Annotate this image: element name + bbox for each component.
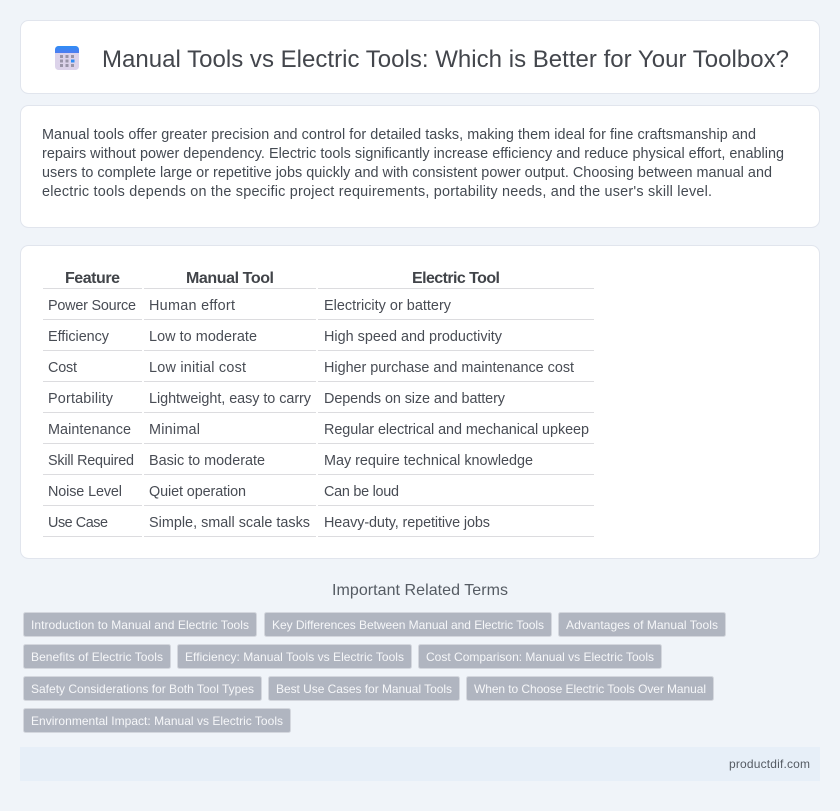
related term tags: Efficiency: Manual Tools vs Electric Tools — [185, 650, 404, 664]
table row: noise level — [48, 484, 399, 500]
related term tags: Cost Comparison: Manual vs Electric Tools — [426, 650, 654, 664]
footer — [20, 747, 820, 781]
related term tags: Key Differences Between Manual and Electric Tools — [272, 618, 544, 632]
table row: use case — [48, 515, 490, 531]
table header: Electric Tool — [412, 270, 500, 287]
related term tags: Safety Considerations for Both Tool Types — [31, 682, 254, 696]
table row: cost — [48, 360, 574, 376]
table header: Manual Tool — [186, 270, 274, 287]
title: Manual Tools vs Electric Tools: Which is Better for Your Toolbox? — [102, 46, 789, 73]
text block: introduction paragraph: users to complete large or repetitive jobs quickly and with consistent power output. Choosing between manual and — [42, 165, 772, 181]
related term tags: Benefits of Electric Tools — [31, 650, 163, 664]
table row: maintenance — [48, 422, 589, 438]
table row: cost: Higher purchase and maintenance cost — [324, 360, 574, 376]
table row: power source: Human effort — [149, 298, 235, 314]
table row: efficiency: High speed and productivity — [324, 329, 503, 345]
table row: power source: Power Source — [48, 298, 136, 314]
table row: noise level: Can be loud — [324, 484, 399, 500]
heading: important related terms: Important Related Terms — [332, 582, 508, 599]
table row: maintenance: Maintenance — [48, 422, 131, 438]
text block: introduction paragraph: electric tools depends on the specific project requirements, portability needs, and the user's skill level. — [42, 184, 712, 200]
related term tags: Introduction to Manual and Electric Tools — [31, 618, 249, 632]
table row: cost: Low initial cost — [149, 360, 246, 376]
icon: calendar — [55, 46, 79, 70]
related term tags: Advantages of Manual Tools — [566, 618, 718, 632]
table row: use case: Simple, small scale tasks — [149, 515, 310, 531]
table row: cost: Cost — [48, 360, 77, 376]
table header: Feature — [65, 270, 120, 287]
table row: power source — [48, 298, 452, 314]
table row: portability: Portability — [48, 391, 114, 407]
related term tags: When to Choose Electric Tools Over Manual — [474, 682, 706, 696]
table header — [65, 270, 500, 287]
panel: header — [20, 20, 820, 94]
related term tags: Best Use Cases for Manual Tools — [276, 682, 452, 696]
table row: skill required: Skill Required — [48, 453, 134, 469]
table row: use case: Heavy-duty, repetitive jobs — [324, 515, 490, 531]
table row: efficiency — [48, 329, 503, 345]
table row: skill required — [48, 453, 533, 469]
footer: productdif.com — [729, 757, 810, 771]
table row: noise level: Quiet operation — [149, 484, 246, 500]
table row: maintenance: Regular electrical and mechanical upkeep — [324, 422, 589, 438]
table row: use case: Use Case — [48, 515, 108, 531]
table row: power source: Electricity or battery — [324, 298, 452, 314]
text block: introduction paragraph — [42, 127, 784, 200]
text block: introduction paragraph: repairs without power dependency. Electric tools significantly increase efficiency and reduce physical effort, enabling — [42, 146, 784, 162]
table row: efficiency: Low to moderate — [149, 329, 257, 345]
table row: noise level: Noise Level — [48, 484, 122, 500]
table row: skill required: May require technical knowledge — [324, 453, 533, 469]
table row: portability — [48, 391, 506, 407]
panel: comparison table — [20, 246, 820, 558]
table row: maintenance: Minimal — [149, 422, 200, 438]
table row: skill required: Basic to moderate — [149, 453, 265, 469]
panel: introduction — [20, 106, 820, 228]
related term tags: Environmental Impact: Manual vs Electric Tools — [31, 714, 283, 728]
table row: portability: Depends on size and battery — [324, 391, 506, 407]
table row: portability: Lightweight, easy to carry — [149, 391, 312, 407]
table row: efficiency: Efficiency — [48, 329, 110, 345]
related term tags — [24, 612, 726, 732]
text block: introduction paragraph: Manual tools offer greater precision and control for detailed tasks, making them ideal for fine craftsmanship and — [42, 127, 756, 143]
